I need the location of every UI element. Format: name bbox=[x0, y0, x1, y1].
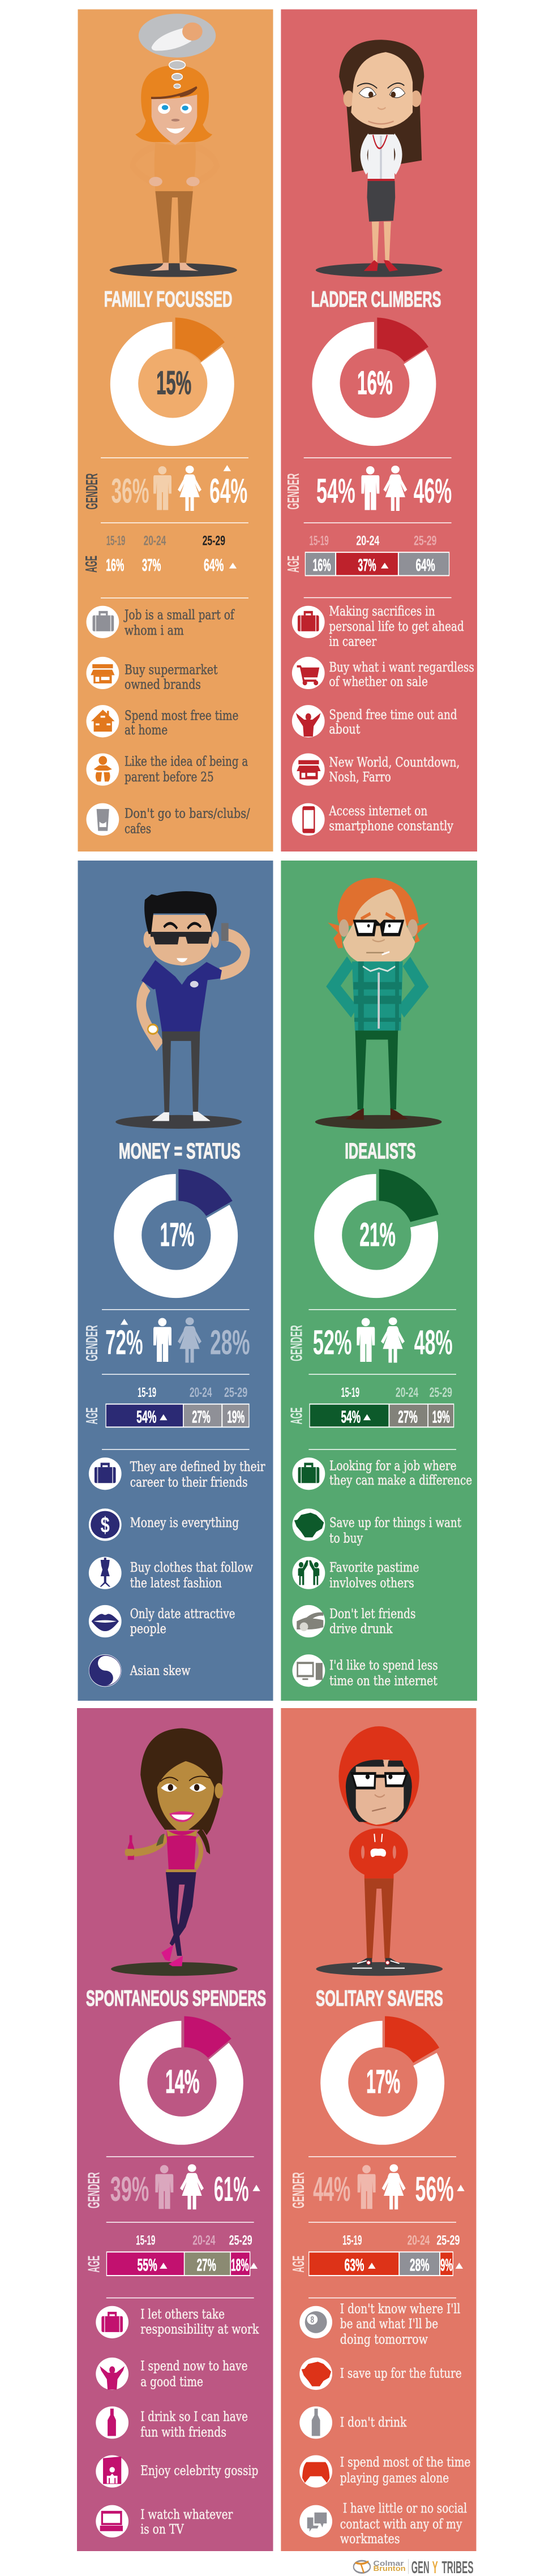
trait: supermarkets: Nosh, Farro bbox=[329, 769, 391, 785]
heading: SPONTANEOUS SPENDERS bbox=[86, 1986, 266, 2011]
panel: family focussed: GENDER bbox=[83, 474, 101, 510]
age split: AGE bbox=[82, 556, 100, 573]
trait: good time: I spend now to have bbox=[140, 2358, 248, 2374]
trait: asian skew bbox=[89, 1654, 191, 1687]
trait: games: playing games alone bbox=[340, 2470, 449, 2485]
gender split: 54% bbox=[316, 472, 355, 510]
gender split: 36% bbox=[111, 472, 149, 510]
donut chart: 14% bbox=[119, 2011, 254, 2145]
trait: supermarket brands: Buy supermarket bbox=[125, 661, 218, 677]
trait: parent bbox=[86, 753, 248, 786]
donut chart: 14%: 14% bbox=[165, 2063, 200, 2100]
trait: bars: Don't go to bars/clubs/ bbox=[125, 805, 250, 821]
age bar bbox=[288, 1385, 454, 1427]
trait: work bbox=[96, 2306, 259, 2338]
trait: bars: cafes bbox=[125, 820, 151, 836]
age bar: 63% bbox=[345, 2255, 364, 2274]
trait: asian skew: Asian skew bbox=[130, 1662, 191, 1678]
age bar: AGE bbox=[289, 2256, 307, 2273]
trait: games bbox=[299, 2454, 471, 2488]
age bar: 19% bbox=[227, 1407, 245, 1427]
age bar: 54% bbox=[136, 1407, 156, 1427]
donut chart: 17% bbox=[114, 1164, 250, 1298]
trait: drinking bbox=[96, 2406, 248, 2440]
age bar: 15-19 bbox=[342, 2233, 362, 2248]
trait: buying: of whether on sale bbox=[329, 674, 428, 690]
trait: pastime: invlolves others bbox=[329, 1575, 414, 1590]
trait: internet: time on the internet bbox=[329, 1672, 438, 1688]
trait: career sacrifices: personal life to get ahead bbox=[329, 618, 464, 634]
trait: driving: Don't let friends bbox=[329, 1606, 415, 1622]
age bar: AGE bbox=[284, 556, 302, 573]
age bar: 27% bbox=[197, 2255, 216, 2274]
trait: career: career to their friends bbox=[130, 1474, 248, 1490]
trait: supermarket brands bbox=[86, 657, 218, 692]
trait: job bbox=[293, 1457, 472, 1490]
gender split bbox=[83, 465, 247, 511]
trait: money: Money is everything bbox=[130, 1515, 239, 1530]
gender split: 46% bbox=[414, 472, 452, 510]
character: woman with bottle bbox=[111, 1728, 238, 1976]
trait: supermarket brands: owned brands bbox=[125, 676, 201, 692]
trait: fashion: Buy clothes that follow bbox=[130, 1559, 253, 1575]
trait: work: I let others take bbox=[140, 2306, 225, 2322]
age split: 16% bbox=[106, 555, 124, 575]
character: red-haired man with glasses bbox=[315, 878, 441, 1129]
footer: logos: Colmar bbox=[374, 2560, 404, 2568]
age bar: 25-29 bbox=[224, 1385, 247, 1400]
trait: dating bbox=[89, 1605, 235, 1637]
character: woman in skirt bbox=[316, 40, 442, 277]
gender split bbox=[83, 1317, 250, 1362]
gender split: 61% bbox=[214, 2170, 249, 2209]
panel: ladder climbers bbox=[281, 9, 477, 852]
trait: uncertainty: be and what I'll be bbox=[340, 2316, 438, 2332]
trait: social contact: contact with any of my bbox=[340, 2516, 462, 2532]
age split: 15-19 bbox=[106, 534, 125, 548]
trait: no drinking: I don't drink bbox=[340, 2414, 407, 2430]
age bar: 37% bbox=[358, 555, 376, 575]
trait: saving: Save up for things i want bbox=[329, 1515, 461, 1530]
heading: IDEALISTS bbox=[345, 1139, 415, 1164]
panel: ladder climbers: GENDER bbox=[284, 474, 302, 510]
trait: pastime: Favorite pastime bbox=[329, 1559, 419, 1575]
trait: uncertainty: 8 bbox=[310, 2315, 314, 2325]
age bar bbox=[289, 2233, 463, 2276]
age bar: 25-29 bbox=[436, 2233, 460, 2248]
trait: saving: I save up for the future bbox=[340, 2365, 462, 2381]
trait: uncertainty: I don't know where I'll bbox=[340, 2300, 460, 2316]
age split: 20-24 bbox=[144, 534, 166, 548]
age bar: 15-19 bbox=[341, 1385, 359, 1400]
trait: gossip bbox=[96, 2455, 258, 2488]
age bar: 54% bbox=[341, 1407, 361, 1427]
age bar: AGE bbox=[85, 2256, 103, 2273]
trait: fashion bbox=[89, 1557, 253, 1590]
trait: driving: drive drunk bbox=[329, 1620, 393, 1636]
trait: free time bbox=[292, 705, 457, 737]
trait: parent: parent before 25 bbox=[125, 769, 214, 785]
age bar: AGE bbox=[288, 1407, 306, 1425]
age bar: 20-24 bbox=[396, 1385, 418, 1400]
donut chart: 16%: 16% bbox=[357, 364, 393, 401]
trait: drinking: fun with friends bbox=[140, 2424, 226, 2440]
trait: career sacrifices: Making sacrifices in bbox=[329, 603, 435, 619]
trait: saving bbox=[293, 1508, 461, 1546]
trait: home: Spend most free time bbox=[125, 707, 238, 723]
gender split bbox=[288, 1317, 453, 1362]
panel: money = status: GENDER bbox=[83, 1325, 101, 1361]
age bar: 15-19 bbox=[309, 534, 329, 548]
age bar bbox=[85, 2233, 258, 2276]
trait: pastime bbox=[293, 1557, 419, 1590]
donut chart: 17%: 17% bbox=[366, 2063, 400, 2100]
trait: good time bbox=[96, 2358, 248, 2390]
trait: internet: I'd like to spend less bbox=[329, 1657, 438, 1673]
age bar: 16% bbox=[312, 555, 331, 575]
heading: MONEY = STATUS bbox=[119, 1139, 241, 1164]
gender split: 44% bbox=[313, 2170, 350, 2209]
trait: smartphone: Access internet on bbox=[328, 803, 427, 819]
gender split: 64% bbox=[209, 472, 247, 510]
panel: family focussed bbox=[78, 9, 273, 852]
trait: job: Looking for a job where bbox=[329, 1457, 457, 1473]
panel: solitary savers: GENDER bbox=[289, 2172, 307, 2208]
age bar: 15-19 bbox=[136, 2233, 155, 2248]
trait: gossip: Enjoy celebrity gossip bbox=[140, 2462, 258, 2478]
trait: free time: about bbox=[329, 721, 360, 737]
trait: career sacrifices bbox=[292, 603, 464, 649]
trait: home bbox=[86, 705, 238, 738]
panel: idealists: GENDER bbox=[288, 1325, 306, 1361]
trait: saving bbox=[299, 2358, 462, 2390]
age bar: 27% bbox=[192, 1407, 211, 1427]
trait: supermarkets: New World, Countdown, bbox=[329, 754, 460, 770]
trait: uncertainty bbox=[299, 2300, 460, 2347]
gender split bbox=[284, 466, 452, 511]
trait: career sacrifices: in career bbox=[329, 633, 377, 649]
panel: solitary savers bbox=[281, 1708, 477, 2551]
age bar: 55% bbox=[137, 2255, 157, 2274]
trait: parent: Like the idea of being a bbox=[125, 753, 248, 769]
trait: job: they can make a difference bbox=[329, 1472, 472, 1488]
gender split: 28% bbox=[210, 1323, 250, 1362]
age bar: 9% bbox=[440, 2255, 453, 2274]
age bar: 25-29 bbox=[430, 1385, 452, 1400]
donut chart: 15%: 15% bbox=[156, 364, 191, 401]
trait: games: I spend most of the time bbox=[340, 2454, 471, 2470]
character: man with sunglasses and phone bbox=[115, 891, 246, 1129]
character: gamer in red hoodie bbox=[316, 1726, 443, 1976]
heading: FAMILY FOCUSSED bbox=[104, 287, 232, 312]
gender split: 52% bbox=[313, 1323, 352, 1362]
donut chart: 17%: 17% bbox=[160, 1216, 194, 1253]
age split: 64% bbox=[204, 555, 224, 575]
footer: logos bbox=[354, 2557, 474, 2576]
age bar: 27% bbox=[398, 1407, 418, 1427]
donut chart: 16% bbox=[312, 313, 448, 446]
character: woman thinking of a baby bbox=[110, 14, 237, 277]
trait: fashion: the latest fashion bbox=[130, 1575, 222, 1590]
trait: smartphone bbox=[292, 803, 454, 836]
trait: no drinking bbox=[299, 2406, 407, 2439]
age split: 37% bbox=[142, 555, 161, 575]
age bar: 20-24 bbox=[408, 2233, 430, 2248]
panel: spontaneous spenders bbox=[77, 1708, 273, 2551]
panel: money = status bbox=[78, 861, 273, 1701]
gender split: 72% bbox=[105, 1323, 143, 1362]
gender split: 56% bbox=[415, 2170, 454, 2209]
heading: SOLITARY SAVERS bbox=[316, 1986, 443, 2011]
trait: saving: to buy bbox=[329, 1530, 363, 1546]
trait: buying: Buy what i want regardless bbox=[329, 659, 474, 675]
trait: uncertainty: doing tomorrow bbox=[340, 2332, 428, 2347]
age bar: 20-24 bbox=[192, 2233, 216, 2248]
trait: drinking: I drink so I can have bbox=[140, 2409, 248, 2424]
trait: bars bbox=[86, 803, 250, 836]
gender split: 48% bbox=[414, 1323, 453, 1362]
trait: money bbox=[89, 1508, 239, 1541]
trait: social contact: workmates bbox=[340, 2531, 400, 2547]
trait: tv: is on TV bbox=[140, 2521, 184, 2537]
age bar bbox=[284, 534, 449, 576]
trait: buying bbox=[292, 657, 474, 690]
gender split: 39% bbox=[110, 2170, 149, 2209]
donut chart: 21%: 21% bbox=[359, 1216, 396, 1253]
footer: logos: Brunton bbox=[374, 2565, 406, 2573]
trait: tv bbox=[96, 2505, 233, 2538]
trait: social contact bbox=[299, 2500, 467, 2547]
trait: social contact: I have little or no social bbox=[343, 2500, 467, 2516]
age bar: 18% bbox=[231, 2255, 249, 2274]
panel: idealists bbox=[281, 861, 477, 1701]
donut chart: 17% bbox=[320, 2011, 458, 2145]
donut chart: 21% bbox=[314, 1164, 454, 1298]
age split: 25-29 bbox=[203, 534, 225, 548]
gender split bbox=[289, 2164, 465, 2209]
trait: dating: people bbox=[130, 1620, 166, 1636]
trait: dating: Only date attractive bbox=[130, 1606, 235, 1622]
trait: job: whom i am bbox=[125, 622, 184, 638]
trait: smartphone: smartphone constantly bbox=[329, 818, 454, 833]
trait: supermarkets bbox=[292, 753, 460, 786]
age split bbox=[82, 534, 237, 575]
trait: job: Job is a small part of bbox=[123, 607, 235, 622]
age bar: 15-19 bbox=[138, 1385, 156, 1400]
trait: good time: a good time bbox=[140, 2373, 203, 2389]
heading: LADDER CLIMBERS bbox=[311, 287, 441, 312]
trait: internet bbox=[293, 1654, 438, 1688]
trait: driving bbox=[293, 1605, 415, 1637]
trait: free time: Spend free time out and bbox=[329, 707, 457, 723]
age bar: AGE bbox=[83, 1407, 101, 1425]
trait: work: responsibility at work bbox=[140, 2321, 259, 2337]
gender split bbox=[85, 2164, 260, 2209]
age bar: 28% bbox=[410, 2255, 430, 2274]
age bar: 64% bbox=[415, 555, 435, 575]
trait: home: at home bbox=[125, 722, 168, 738]
trait: career: They are defined by their bbox=[130, 1459, 265, 1474]
trait: career bbox=[89, 1457, 265, 1490]
age bar: 25-29 bbox=[229, 2233, 252, 2248]
trait: money: $ bbox=[101, 1513, 110, 1538]
age bar: 25-29 bbox=[414, 534, 436, 548]
age bar: 20-24 bbox=[190, 1385, 212, 1400]
donut chart: 15% bbox=[110, 313, 245, 446]
age bar: 19% bbox=[432, 1407, 450, 1427]
age bar bbox=[83, 1385, 250, 1427]
trait: tv: I watch whatever bbox=[140, 2506, 233, 2522]
panel: spontaneous spenders: GENDER bbox=[85, 2172, 103, 2208]
trait: job bbox=[86, 606, 235, 638]
age bar: 20-24 bbox=[356, 534, 380, 548]
